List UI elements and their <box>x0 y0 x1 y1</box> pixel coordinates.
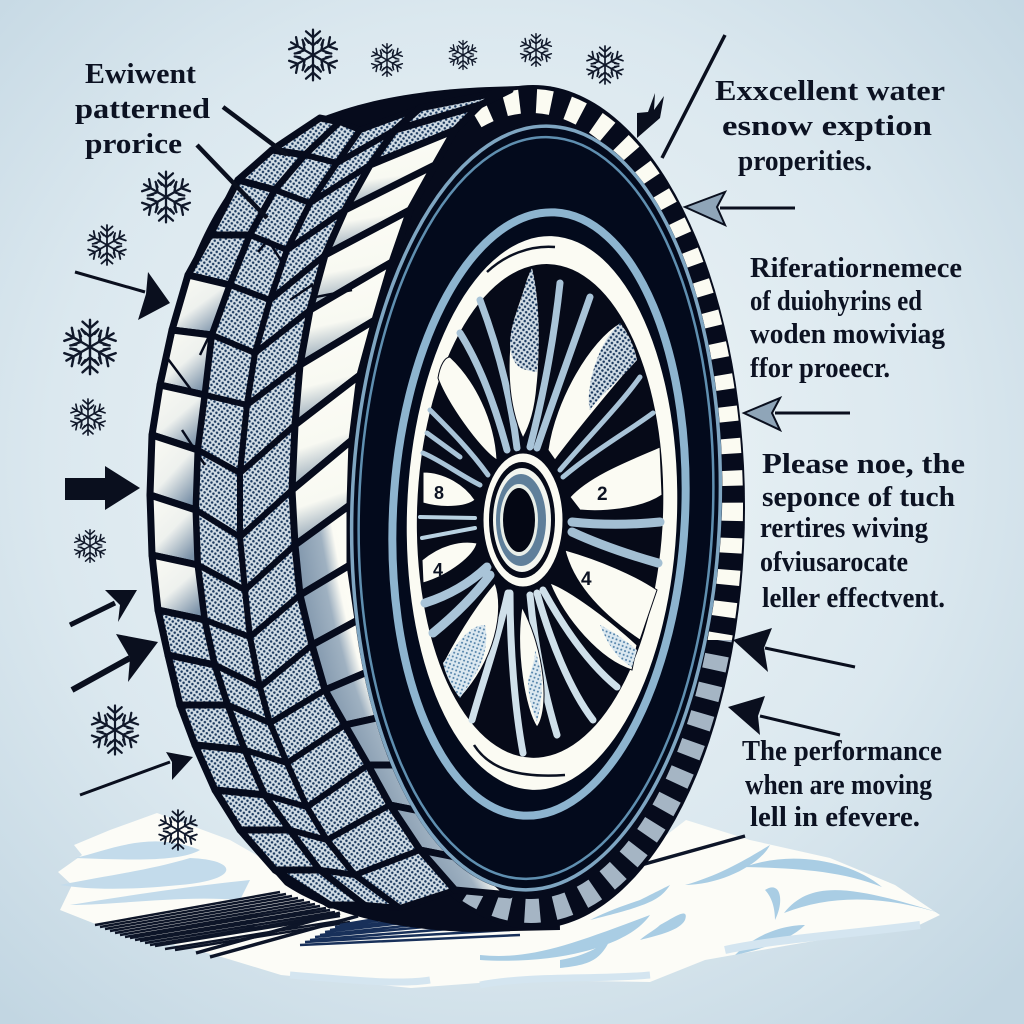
text block: performance <box>742 735 942 833</box>
text block: water: esnow exption <box>722 110 932 142</box>
rim hatch marks <box>474 247 565 776</box>
wheel rim <box>397 231 687 795</box>
text block: performance: when are moving <box>745 769 932 801</box>
text block: please note: leller effectvent. <box>762 582 945 614</box>
callout arrows: right <box>637 35 855 735</box>
text block: patterned <box>75 58 210 160</box>
sidewall wide blue ring <box>377 205 701 823</box>
tread outer column lower <box>158 610 365 905</box>
text block: please note: seponce of tuch <box>762 481 955 513</box>
stippled spoke shading <box>443 268 637 722</box>
text block: patterned: prorice <box>85 128 182 160</box>
spoke numbers: 2 <box>597 484 608 505</box>
upper edge lugs <box>474 89 743 640</box>
outer tire ring <box>321 85 745 929</box>
lower edge lugs <box>462 640 732 923</box>
text block: refrigeration <box>750 252 962 384</box>
thin wheel spokes <box>420 283 660 753</box>
sidewall outer blue line <box>339 120 733 896</box>
snowflakes <box>62 30 624 850</box>
text block: performance: lell in efevere. <box>750 801 920 833</box>
text block: refrigeration: ffor proeecr. <box>750 352 890 384</box>
text block: refrigeration: woden mowiviag <box>750 318 945 350</box>
text block: performance: The performance <box>742 735 942 767</box>
callout arrows: left <box>65 107 287 795</box>
tread inner column upper <box>292 90 510 545</box>
text block: please note: Please noe, the <box>762 448 965 480</box>
text block: water: properities. <box>738 145 872 177</box>
sidewall second blue line <box>346 131 726 885</box>
spoke numbers: 4 <box>581 569 592 590</box>
text block: please note: rertires wiving <box>760 512 928 544</box>
tread crack details <box>165 240 352 465</box>
wheel hub <box>482 452 564 588</box>
spoke numbers <box>433 483 608 590</box>
large wheel spokes <box>422 268 662 727</box>
tire road hatching <box>95 836 745 957</box>
snow ground <box>58 813 940 988</box>
text block: water: Exxcellent water <box>715 75 945 107</box>
tread backing <box>148 86 560 932</box>
tread inner column lower <box>295 505 510 895</box>
text block: please note: ofviusarocate <box>760 546 908 578</box>
spoke numbers: 8 <box>434 483 444 503</box>
text block: refrigeration: of duiohyrins ed <box>750 285 922 317</box>
sidewall <box>337 118 735 898</box>
tread outer column upper <box>150 118 340 620</box>
tire <box>148 85 745 932</box>
text block: patterned: patterned <box>75 93 210 125</box>
text block: water <box>715 75 945 177</box>
text block: please note <box>760 448 965 614</box>
spoke numbers: 4 <box>433 560 443 580</box>
tread middle columns <box>196 108 455 908</box>
text block: patterned: Ewiwent <box>85 58 196 90</box>
text block: refrigeration: Riferatiornemece <box>750 252 962 284</box>
